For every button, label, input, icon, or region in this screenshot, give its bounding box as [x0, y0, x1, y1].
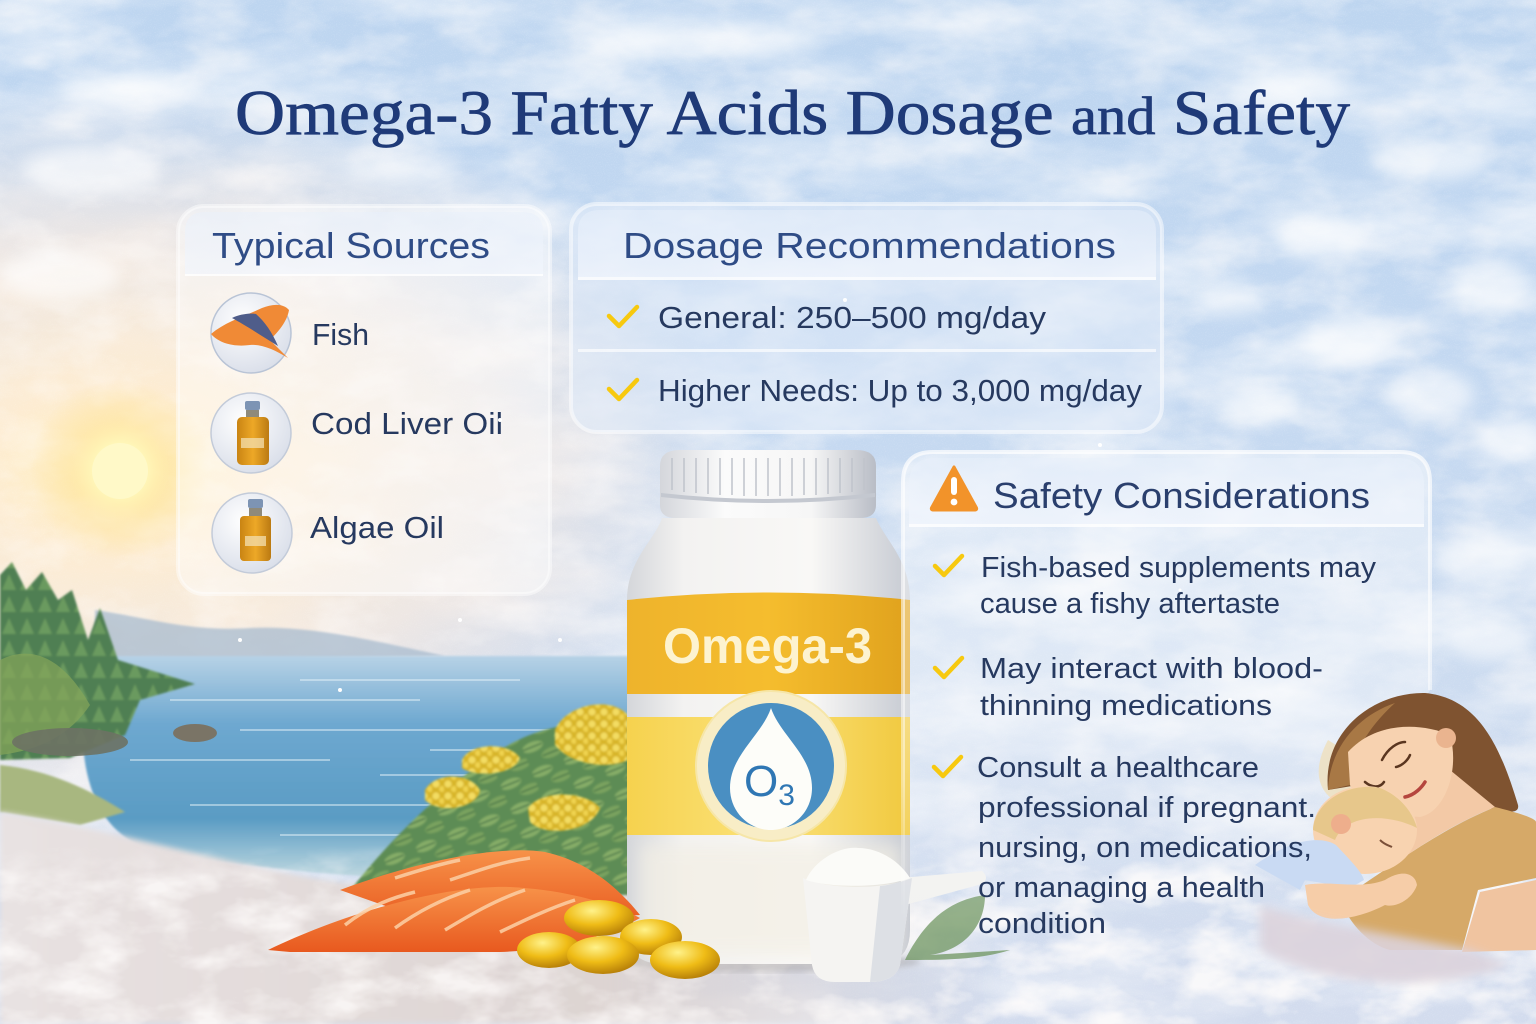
panel: safety considerations	[903, 452, 1430, 930]
heading: safety considerations: Safety Considerations	[993, 475, 1370, 516]
icon: algae oil	[212, 493, 292, 573]
check	[609, 307, 637, 326]
safety: consult text: or managing a health	[978, 872, 1265, 904]
panel: safety considerations: cause a fishy aftertaste	[980, 588, 1280, 620]
distant hills	[95, 610, 445, 662]
dosage: general: General: 250–500 mg/day	[658, 300, 1047, 335]
sea	[82, 656, 640, 882]
powder scoop	[803, 848, 986, 982]
panel: dosage recommendations	[571, 204, 1162, 432]
mother neck and face	[1395, 770, 1495, 860]
mother and baby	[1255, 693, 1536, 983]
mother hair	[1328, 693, 1518, 812]
salmon fillet	[268, 850, 640, 952]
O3 mark: 3	[778, 779, 795, 812]
coastal landscape	[0, 561, 1536, 1024]
check	[934, 757, 961, 776]
heading: dosage recommendations: Dosage Recommendations	[623, 225, 1116, 266]
check	[609, 380, 637, 399]
mother arm	[1462, 880, 1536, 952]
safety: consult text: Consult a healthcare	[977, 752, 1259, 784]
sun	[30, 380, 210, 560]
baby head	[1313, 786, 1417, 874]
bottle body	[627, 518, 910, 964]
safety: consult text	[977, 752, 1316, 940]
label: algae oil: Algae Oil	[310, 510, 444, 545]
safety: consult text: condition	[978, 908, 1106, 940]
dosage: higher needs: Higher Needs: Up to 3,000 mg/day	[658, 373, 1142, 408]
cap	[660, 450, 876, 518]
blanket	[1260, 905, 1510, 983]
safety: interactions: May interact with blood-	[980, 653, 1323, 685]
check	[935, 556, 962, 575]
safety: consult text: nursing, on medications,	[978, 832, 1312, 864]
plants and flowers	[352, 704, 630, 895]
supplement bottle	[620, 450, 920, 972]
green leaves behind scoop	[905, 895, 1010, 960]
icon: fish	[211, 293, 291, 373]
orange label band	[627, 592, 910, 694]
pillow	[1319, 740, 1360, 806]
sparkles	[238, 298, 1232, 702]
yellow label band	[627, 717, 910, 835]
label: cod liver oil: Cod Liver Oil	[311, 406, 503, 441]
shore	[0, 765, 125, 825]
safety: consult text: professional if pregnant.	[978, 792, 1316, 824]
heading: typical sources: Typical Sources	[212, 225, 490, 266]
mother eyes and mouth	[1365, 742, 1410, 786]
check	[935, 658, 962, 677]
omega-3 drop badge	[696, 691, 846, 841]
baby shirt	[1255, 840, 1364, 890]
softgel capsules	[517, 900, 720, 979]
label: fish: Fish	[312, 317, 369, 352]
O3 mark: O	[744, 757, 778, 806]
rocks	[173, 724, 217, 742]
panel: safety considerations: thinning medications	[980, 690, 1272, 722]
mother shirt	[1340, 807, 1536, 950]
icon: cod liver oil	[211, 393, 291, 473]
icon: warning triangle	[931, 467, 977, 510]
safety: aftertaste: Fish-based supplements may	[981, 552, 1377, 584]
title: Omega-3 Fatty Acids Dosage and Safety	[235, 77, 1350, 148]
baby arm and hand	[1305, 874, 1417, 919]
bottle brand text: Omega-3	[663, 618, 872, 674]
trees	[0, 562, 195, 760]
panel: typical sources	[178, 206, 550, 594]
